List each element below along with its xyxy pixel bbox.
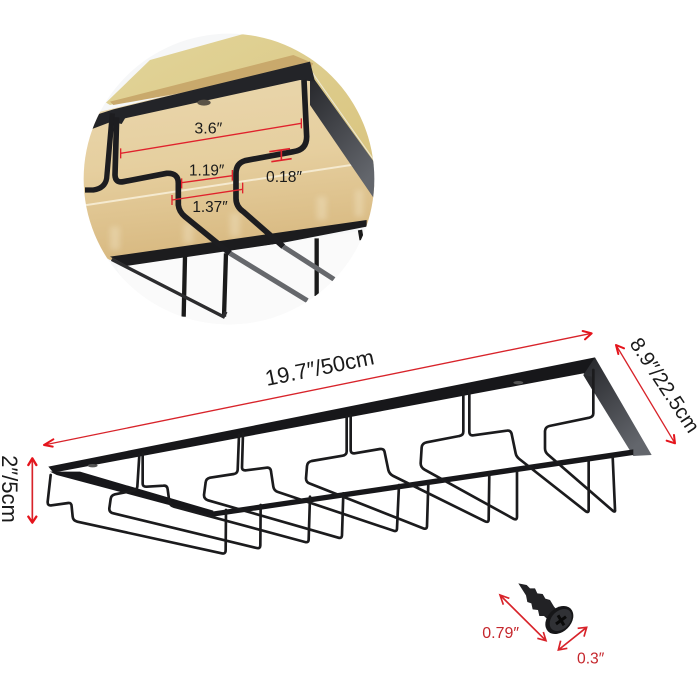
- arrow: length: [44, 331, 592, 447]
- label 1.19 inch: 1.19″: [189, 162, 225, 179]
- measurement lines in detail circle: [121, 118, 301, 205]
- label 0.18 inch: 0.18″: [266, 169, 302, 186]
- rack frame: [48, 357, 652, 517]
- arrow: screw length: [500, 595, 546, 641]
- rack full view: [28, 331, 675, 554]
- label: length 19.7 inch / 50cm: 19.7″/50cm: [263, 344, 376, 391]
- label 1.37 inch: 1.37″: [192, 199, 228, 216]
- label 0.3 inch: 0.3″: [577, 650, 605, 667]
- icon: screw: [518, 583, 579, 640]
- label 3.6 inch: 3.6″: [194, 120, 223, 137]
- arrow: height: [28, 458, 36, 523]
- detail circle: close-up of rack under shelf: [80, 30, 380, 330]
- rack prongs: [48, 370, 615, 554]
- screw detail: [482, 583, 605, 667]
- label 0.79 inch: 0.79″: [482, 625, 519, 642]
- arrow: width: [616, 345, 675, 443]
- arrow: screw head width: [558, 627, 587, 650]
